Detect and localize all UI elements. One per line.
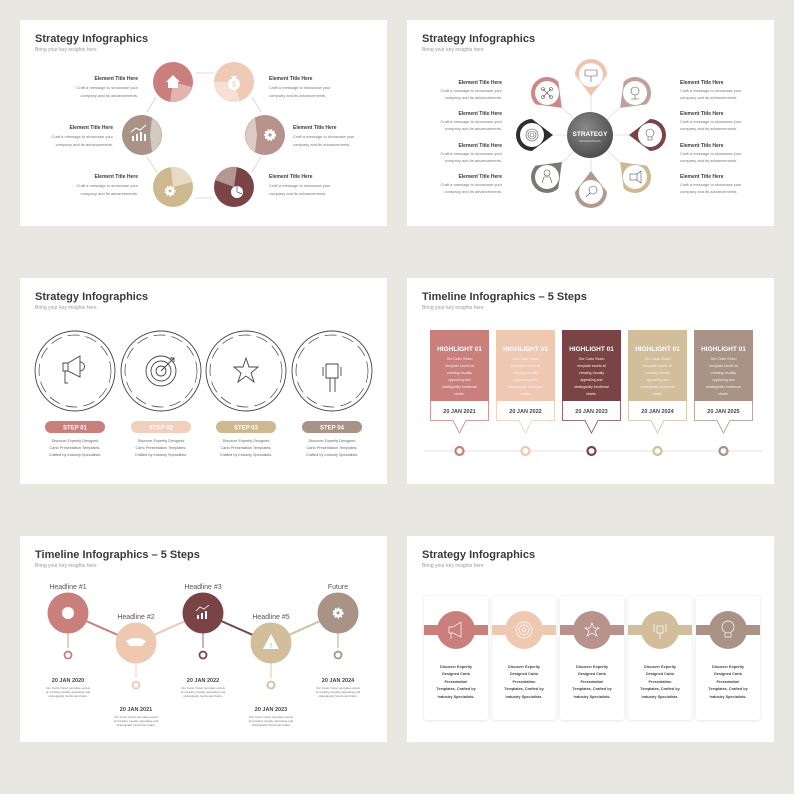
dates and descriptions: at creating visually appealing and — [181, 690, 226, 694]
step descriptions: Discover Expertly Designed — [52, 439, 98, 443]
card icons — [449, 621, 734, 639]
card texts: 20 JAN 2021 — [443, 409, 476, 415]
text blocks left: Craft a message to showcase your — [440, 182, 503, 187]
step descriptions: Crafted by Industry Specialists. — [306, 453, 358, 457]
stems and rings — [64, 633, 342, 688]
text blocks: company and its advancements. — [81, 191, 138, 196]
text blocks left: Craft a message to showcase your — [440, 151, 503, 156]
title: Strategy Infographics — [422, 33, 535, 45]
subtitle: Bring your key insights here — [422, 47, 484, 53]
highlight cards — [430, 330, 753, 455]
dates and descriptions: at creating visually appealing and — [316, 690, 361, 694]
step descriptions: Discover Expertly Designed — [309, 439, 355, 443]
text blocks: Element Title Here — [94, 76, 138, 82]
card texts: Our Carto Vision — [579, 357, 604, 361]
title: Strategy Infographics — [422, 549, 535, 561]
text blocks left: Element Title Here — [458, 174, 502, 180]
step descriptions: Discover Expertly Designed — [138, 439, 184, 443]
panel: cycle strategy infographic — [20, 20, 387, 226]
text blocks right: Element Title Here — [680, 80, 724, 86]
card texts: charts. — [718, 392, 729, 396]
panel: radial strategy infographic — [407, 20, 774, 226]
card texts: Presentation — [512, 680, 536, 684]
step pills: STEP 03 — [234, 426, 259, 432]
card texts: strategically functional — [574, 385, 609, 389]
card texts: Templates, Crafted by — [504, 687, 545, 691]
card texts: 20 JAN 2025 — [707, 409, 740, 415]
card texts: charts. — [520, 392, 531, 396]
circle: pie maroon — [214, 167, 254, 207]
dates and descriptions: 20 JAN 2022 — [187, 678, 219, 684]
dates and descriptions: 20 JAN 2020 — [52, 678, 84, 684]
card texts: HIGHLIGHT 01 — [503, 346, 548, 353]
text blocks right: Element Title Here — [680, 111, 724, 117]
card texts — [436, 665, 749, 699]
card texts: Industry Specialists. — [438, 695, 474, 699]
card texts: charts. — [454, 392, 465, 396]
card texts: Designed Carto — [578, 672, 607, 676]
panel: cycle strategy infographic: Craft a message to showcase your — [269, 85, 331, 90]
card texts: Designed Carto — [442, 672, 471, 676]
circle: money bag — [214, 62, 254, 102]
card texts: charts. — [652, 392, 663, 396]
dates and descriptions: 20 JAN 2023 — [255, 707, 287, 713]
text blocks right: Element Title Here — [680, 143, 724, 149]
card texts: charts. — [586, 392, 597, 396]
text blocks right: company and its advancements. — [680, 189, 737, 194]
card texts: creating visually — [513, 371, 538, 375]
dates and descriptions: at creating visually appealing and — [46, 690, 91, 694]
step descriptions: Carto Presentation Templates, — [49, 446, 101, 450]
card texts: Industry Specialists. — [506, 695, 542, 699]
bands and circles — [424, 611, 760, 649]
text blocks: company and its advancements. — [81, 93, 138, 98]
text blocks: company and its advancements. — [56, 142, 113, 147]
card texts: Designed Carto — [714, 672, 743, 676]
card texts: appealing and — [580, 378, 603, 382]
step circles — [35, 331, 372, 411]
card texts: Presentation — [444, 680, 468, 684]
circle: money bag: $ — [232, 82, 236, 88]
card texts: strategically functional — [706, 385, 741, 389]
icons: megaphone, target, star, dumbbell — [63, 356, 341, 392]
card texts: template excels at — [709, 364, 738, 368]
card texts: Presentation — [716, 680, 740, 684]
headlines: Headline #5 — [252, 614, 290, 621]
dates and descriptions: at creating visually appealing and — [249, 719, 294, 723]
panel: four steps — [20, 278, 387, 484]
card texts: template excels at — [445, 364, 474, 368]
step pills: STEP 04 — [320, 426, 345, 432]
text blocks right: Craft a message to showcase your — [680, 182, 742, 187]
step descriptions — [49, 439, 358, 457]
connectors — [68, 613, 338, 643]
dates and descriptions: strategically functional charts. — [251, 723, 291, 727]
headlines: Headline #1 — [49, 584, 87, 591]
card texts: Templates, Crafted by — [572, 687, 613, 691]
title: Timeline Infographics – 5 Steps — [422, 291, 587, 303]
dates and descriptions: Our Carto Vision template excels — [46, 686, 90, 690]
text blocks: Element Title Here — [69, 125, 113, 131]
text blocks right: Element Title Here — [680, 174, 724, 180]
card texts: Designed Carto — [510, 672, 539, 676]
card texts: Templates, Crafted by — [436, 687, 477, 691]
card texts: HIGHLIGHT 01 — [635, 346, 680, 353]
text blocks left: Element Title Here — [458, 80, 502, 86]
card texts: creating visually — [645, 371, 670, 375]
step descriptions: Carto Presentation Templates, — [220, 446, 272, 450]
arrows between circles — [147, 73, 261, 198]
headlines — [49, 584, 348, 621]
text blocks: Craft a message to showcase your — [76, 85, 139, 90]
step descriptions: Discover Expertly Designed — [223, 439, 269, 443]
headlines: Headline #2 — [117, 614, 155, 621]
dates and descriptions: 20 JAN 2021 — [120, 707, 152, 713]
card texts: Discover Expertly — [508, 665, 541, 669]
panel: cycle strategy infographic: Element Title Here — [269, 76, 313, 82]
card texts: appealing and — [712, 378, 735, 382]
step descriptions: Carto Presentation Templates, — [306, 446, 358, 450]
subtitle: Bring your key insights here — [35, 47, 97, 53]
panel: cycle strategy infographic: Craft a message to showcase your — [293, 134, 355, 139]
step descriptions: Crafted by Industry Specialists. — [135, 453, 187, 457]
subtitle: Bring your key insights here — [35, 305, 97, 311]
card texts: appealing and — [448, 378, 471, 382]
card texts: HIGHLIGHT 01 — [437, 346, 482, 353]
text blocks right: company and its advancements. — [680, 158, 737, 163]
center hub — [567, 112, 613, 158]
text blocks left: Element Title Here — [458, 143, 502, 149]
pins — [516, 59, 666, 208]
text blocks: Element Title Here — [94, 174, 138, 180]
panel: cycle strategy infographic: Element Title Here — [269, 174, 313, 180]
panel: cycle strategy infographic: company and its advancements. — [269, 191, 326, 196]
title: Strategy Infographics — [35, 33, 148, 45]
dates and descriptions: Our Carto Vision template excels — [249, 715, 293, 719]
text blocks right: Craft a message to showcase your — [680, 151, 742, 156]
step pills — [45, 421, 362, 433]
milestone circles — [48, 592, 358, 664]
card texts: template excels at — [577, 364, 606, 368]
dates and descriptions: strategically functional charts. — [48, 694, 88, 698]
text blocks left — [440, 80, 503, 194]
dates and descriptions: Our Carto Vision template excels — [181, 686, 225, 690]
panel: zigzag timeline — [20, 536, 387, 742]
card texts: appealing and — [646, 378, 669, 382]
text blocks left: company and its advancements. — [445, 95, 502, 100]
pin icons — [526, 70, 654, 197]
headlines: Headline #3 — [184, 584, 222, 591]
dates and descriptions — [46, 678, 361, 727]
card texts: Industry Specialists. — [574, 695, 610, 699]
circle: home — [153, 62, 193, 102]
text blocks left: company and its advancements. — [445, 189, 502, 194]
card texts: strategically functional — [640, 385, 675, 389]
subtitle: Bring your key insights here — [35, 563, 97, 569]
text blocks left: Element Title Here — [458, 111, 502, 117]
card texts: 20 JAN 2022 — [509, 409, 542, 415]
step pills: STEP 02 — [149, 426, 174, 432]
title: Strategy Infographics — [35, 291, 148, 303]
text blocks: Craft a message to showcase your — [76, 183, 139, 188]
card texts: Our Carto Vision — [513, 357, 538, 361]
panel: cycle strategy infographic: company and its advancements. — [269, 93, 326, 98]
panel: cycle strategy infographic: Element Title Here — [293, 125, 337, 131]
text blocks right — [680, 80, 742, 194]
subtitle: Bring your key insights here — [422, 305, 484, 311]
text blocks left: company and its advancements. — [445, 158, 502, 163]
milestone circles: ! — [270, 643, 272, 650]
card texts: creating visually — [711, 371, 736, 375]
cards — [424, 596, 760, 720]
card texts: HIGHLIGHT 01 — [701, 346, 746, 353]
card texts: Discover Expertly — [644, 665, 677, 669]
text blocks left: company and its advancements. — [445, 126, 502, 131]
card texts: Designed Carto — [646, 672, 675, 676]
card texts: Templates, Crafted by — [708, 687, 749, 691]
card texts: creating visually — [579, 371, 604, 375]
card texts: Our Carto Vision — [711, 357, 736, 361]
step descriptions: Crafted by Industry Specialists. — [220, 453, 272, 457]
card texts: Discover Expertly — [576, 665, 609, 669]
circle: gear sand — [153, 167, 193, 207]
card texts: Discover Expertly — [712, 665, 745, 669]
dates and descriptions: at creating visually appealing and — [114, 719, 159, 723]
dates and descriptions: strategically functional charts. — [183, 694, 223, 698]
card texts: Industry Specialists. — [642, 695, 678, 699]
headlines: Future — [328, 584, 348, 591]
card texts: Our Carto Vision — [645, 357, 670, 361]
card texts — [437, 346, 746, 415]
text blocks: Craft a message to showcase your — [51, 134, 114, 139]
dates and descriptions: 20 JAN 2024 — [322, 678, 355, 684]
dates and descriptions: Our Carto Vision template excels — [114, 715, 158, 719]
text blocks left: Craft a message to showcase your — [440, 88, 503, 93]
step descriptions: Crafted by Industry Specialists. — [49, 453, 101, 457]
dates and descriptions: strategically functional charts. — [116, 723, 156, 727]
text blocks — [51, 76, 139, 196]
text blocks right: company and its advancements. — [680, 95, 737, 100]
card texts: 20 JAN 2023 — [575, 409, 608, 415]
card texts: 20 JAN 2024 — [641, 409, 675, 415]
step descriptions: Carto Presentation Templates, — [135, 446, 187, 450]
center hub: STRATEGY — [573, 131, 608, 138]
card texts: strategically functional — [508, 385, 543, 389]
card texts: Industry Specialists. — [710, 695, 746, 699]
circle: chart — [122, 115, 162, 155]
card texts: Discover Expertly — [440, 665, 473, 669]
text blocks left: Craft a message to showcase your — [440, 119, 503, 124]
card texts: Templates, Crafted by — [640, 687, 681, 691]
card texts: Our Carto Vision — [447, 357, 472, 361]
card texts: creating visually — [447, 371, 472, 375]
text blocks right: Craft a message to showcase your — [680, 119, 742, 124]
timeline line — [424, 450, 762, 452]
panel: cycle strategy infographic: Craft a message to showcase your — [269, 183, 331, 188]
card texts: template excels at — [511, 364, 540, 368]
card texts: appealing and — [514, 378, 537, 382]
panel: timeline highlights — [407, 278, 774, 484]
panel: cycle strategy infographic: company and its advancements. — [293, 142, 350, 147]
card texts: strategically functional — [442, 385, 477, 389]
title: Timeline Infographics – 5 Steps — [35, 549, 200, 561]
dates and descriptions: strategically functional charts. — [318, 694, 358, 698]
card texts: Presentation — [648, 680, 672, 684]
step pills: STEP 01 — [63, 426, 88, 432]
card texts: HIGHLIGHT 01 — [569, 346, 614, 353]
text blocks right: company and its advancements. — [680, 126, 737, 131]
card texts: Presentation — [580, 680, 604, 684]
center hub: INFOGRAPHICS — [579, 139, 601, 143]
panel: five cards — [407, 536, 774, 742]
spokes — [532, 75, 650, 192]
dates and descriptions: Our Carto Vision template excels — [316, 686, 360, 690]
circle: gear mauve — [245, 115, 285, 155]
card texts: template excels at — [643, 364, 672, 368]
text blocks right: Craft a message to showcase your — [680, 88, 742, 93]
subtitle: Bring your key insights here — [422, 563, 484, 569]
